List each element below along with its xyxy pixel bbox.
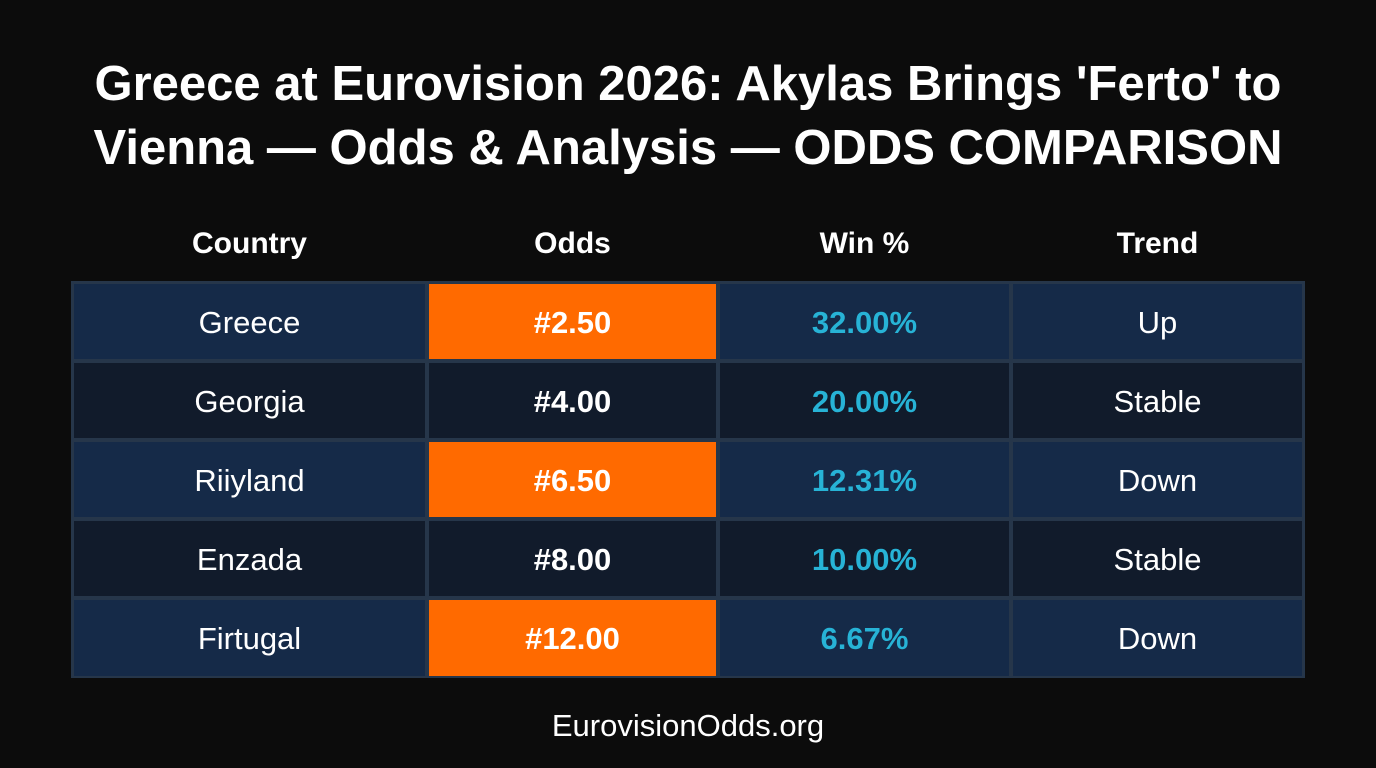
row: Enzada: #8.00: [534, 542, 611, 576]
row: Georgia: #4.00: [534, 384, 611, 418]
header row: Odds: [534, 227, 611, 260]
odds table: [71, 281, 1305, 678]
title: Vienna — Odds & Analysis — ODDS COMPARISON: [94, 121, 1282, 175]
footer source: EurovisionOdds.org: [552, 708, 824, 743]
row: Enzada: Enzada: [197, 542, 302, 576]
row: Riiyland: Down: [1118, 462, 1197, 498]
row: Greece: 32.00%: [812, 304, 917, 340]
title: Greece at Eurovision 2026: Akylas Brings 'Ferto' to: [94, 57, 1282, 111]
row: Firtugal: Down: [1118, 621, 1197, 656]
row: Greece: #2.50: [534, 304, 611, 340]
row: Riiyland: 12.31%: [812, 462, 917, 498]
row: Georgia: Stable: [1114, 384, 1201, 418]
row: Firtugal: [74, 600, 1302, 676]
row: Enzada: [74, 521, 1302, 596]
row: Greece: Greece: [199, 304, 300, 340]
row: Enzada: 10.00%: [812, 542, 917, 576]
row: Firtugal: Firtugal: [198, 621, 301, 656]
row: Georgia: [74, 363, 1302, 438]
title: [94, 57, 1282, 175]
header row: Win %: [820, 227, 909, 260]
header row: [192, 227, 1198, 260]
row: Riiyland: #6.50: [534, 462, 611, 498]
row: Greece: Up: [1138, 304, 1177, 340]
row: Riiyland: [74, 442, 1302, 517]
header row: Country: [192, 227, 307, 260]
row: Riiyland: Riiyland: [194, 462, 305, 498]
row: Firtugal: #12.00: [525, 621, 620, 656]
row: Greece: [74, 284, 1302, 359]
header row: Trend: [1117, 227, 1198, 260]
row: Georgia: 20.00%: [812, 384, 917, 418]
row: Firtugal: 6.67%: [821, 621, 908, 656]
row: Enzada: Stable: [1114, 542, 1201, 576]
row: Georgia: Georgia: [194, 384, 305, 418]
